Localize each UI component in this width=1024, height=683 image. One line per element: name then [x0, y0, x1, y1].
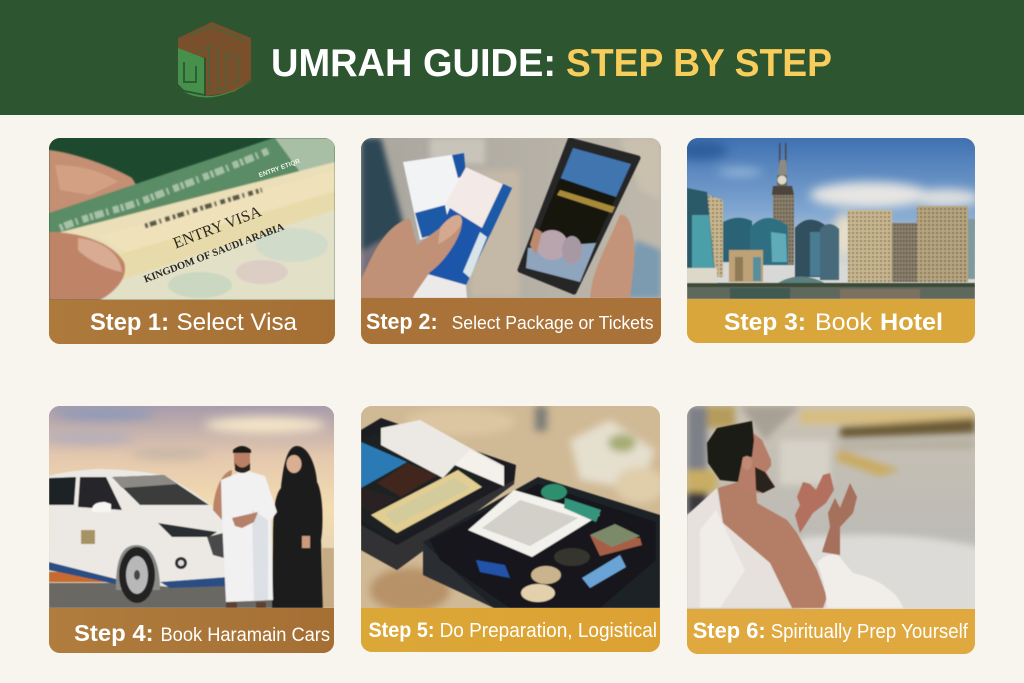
- caption band: Step 5:: [368, 619, 434, 642]
- caption band: [687, 618, 975, 654]
- caption band: Select Package or Tickets: [452, 312, 654, 333]
- caption band: [361, 309, 661, 344]
- small items: [541, 484, 567, 500]
- title: STEP BY STEP: [566, 42, 832, 85]
- caption band: Step 1:: [90, 309, 169, 336]
- photo: entry visa held in fingers: ENTRY VISA: [171, 203, 264, 252]
- prayer book: [468, 490, 600, 557]
- caption band: [49, 309, 335, 344]
- panel: step 1 select visa: [49, 138, 335, 344]
- photo: Makkah skyline with clock tower: [687, 138, 975, 299]
- panel: step 2 select package or tickets: [361, 138, 661, 344]
- woman in abaya: [272, 446, 323, 608]
- caption band: Step 4:: [74, 620, 154, 646]
- clock tower: [779, 143, 780, 163]
- caption band: Step 2:: [366, 309, 438, 334]
- panel: step 3 book hotel: [687, 138, 975, 343]
- torso and shoulder: [718, 482, 827, 608]
- title: [271, 42, 832, 85]
- caption band: Book: [815, 309, 873, 336]
- hotels: [848, 210, 892, 282]
- caption band: [687, 309, 975, 343]
- caption band: Select Visa: [176, 309, 298, 336]
- man in ihram: [213, 470, 232, 520]
- documents: [361, 442, 407, 488]
- caption band: [361, 619, 660, 652]
- suitcase lid: [361, 418, 516, 570]
- caption band: Book Haramain Cars: [160, 625, 330, 646]
- photo: entry visa held in fingers: ENTRY ETIQR: [258, 158, 301, 179]
- panel: step 4 book haramain cars: [49, 406, 334, 653]
- head: [738, 432, 775, 493]
- car body: [49, 469, 228, 587]
- caption band: Step 6:: [693, 618, 766, 643]
- towels: [381, 420, 504, 486]
- photo: hands with tickets and phone: [361, 138, 661, 298]
- caption band: Hotel: [880, 309, 943, 336]
- left towers: [708, 195, 723, 277]
- logo: [178, 22, 256, 98]
- panel: step 6 spiritually prep yourself: [687, 406, 975, 654]
- photo: pilgrim praying in ihram: [687, 406, 975, 609]
- photo: open suitcase of umrah essentials: [361, 406, 660, 608]
- suitcase base: [423, 477, 660, 608]
- raised arms and hands: [795, 473, 834, 533]
- photo: entry visa held in fingers: KINGDOM OF SAUDI ARABIA: [142, 222, 286, 286]
- white ihram cloth: [687, 488, 792, 608]
- photo: entry visa held in fingers: [49, 138, 335, 300]
- title: UMRAH GUIDE:: [271, 42, 556, 85]
- caption band: Step 3:: [724, 309, 806, 336]
- photo: white car with pilgrim couple: [49, 406, 334, 608]
- caption band: [49, 608, 334, 653]
- panel: step 5 do preparation, logistical: [361, 406, 660, 652]
- header banner: [0, 0, 1024, 114]
